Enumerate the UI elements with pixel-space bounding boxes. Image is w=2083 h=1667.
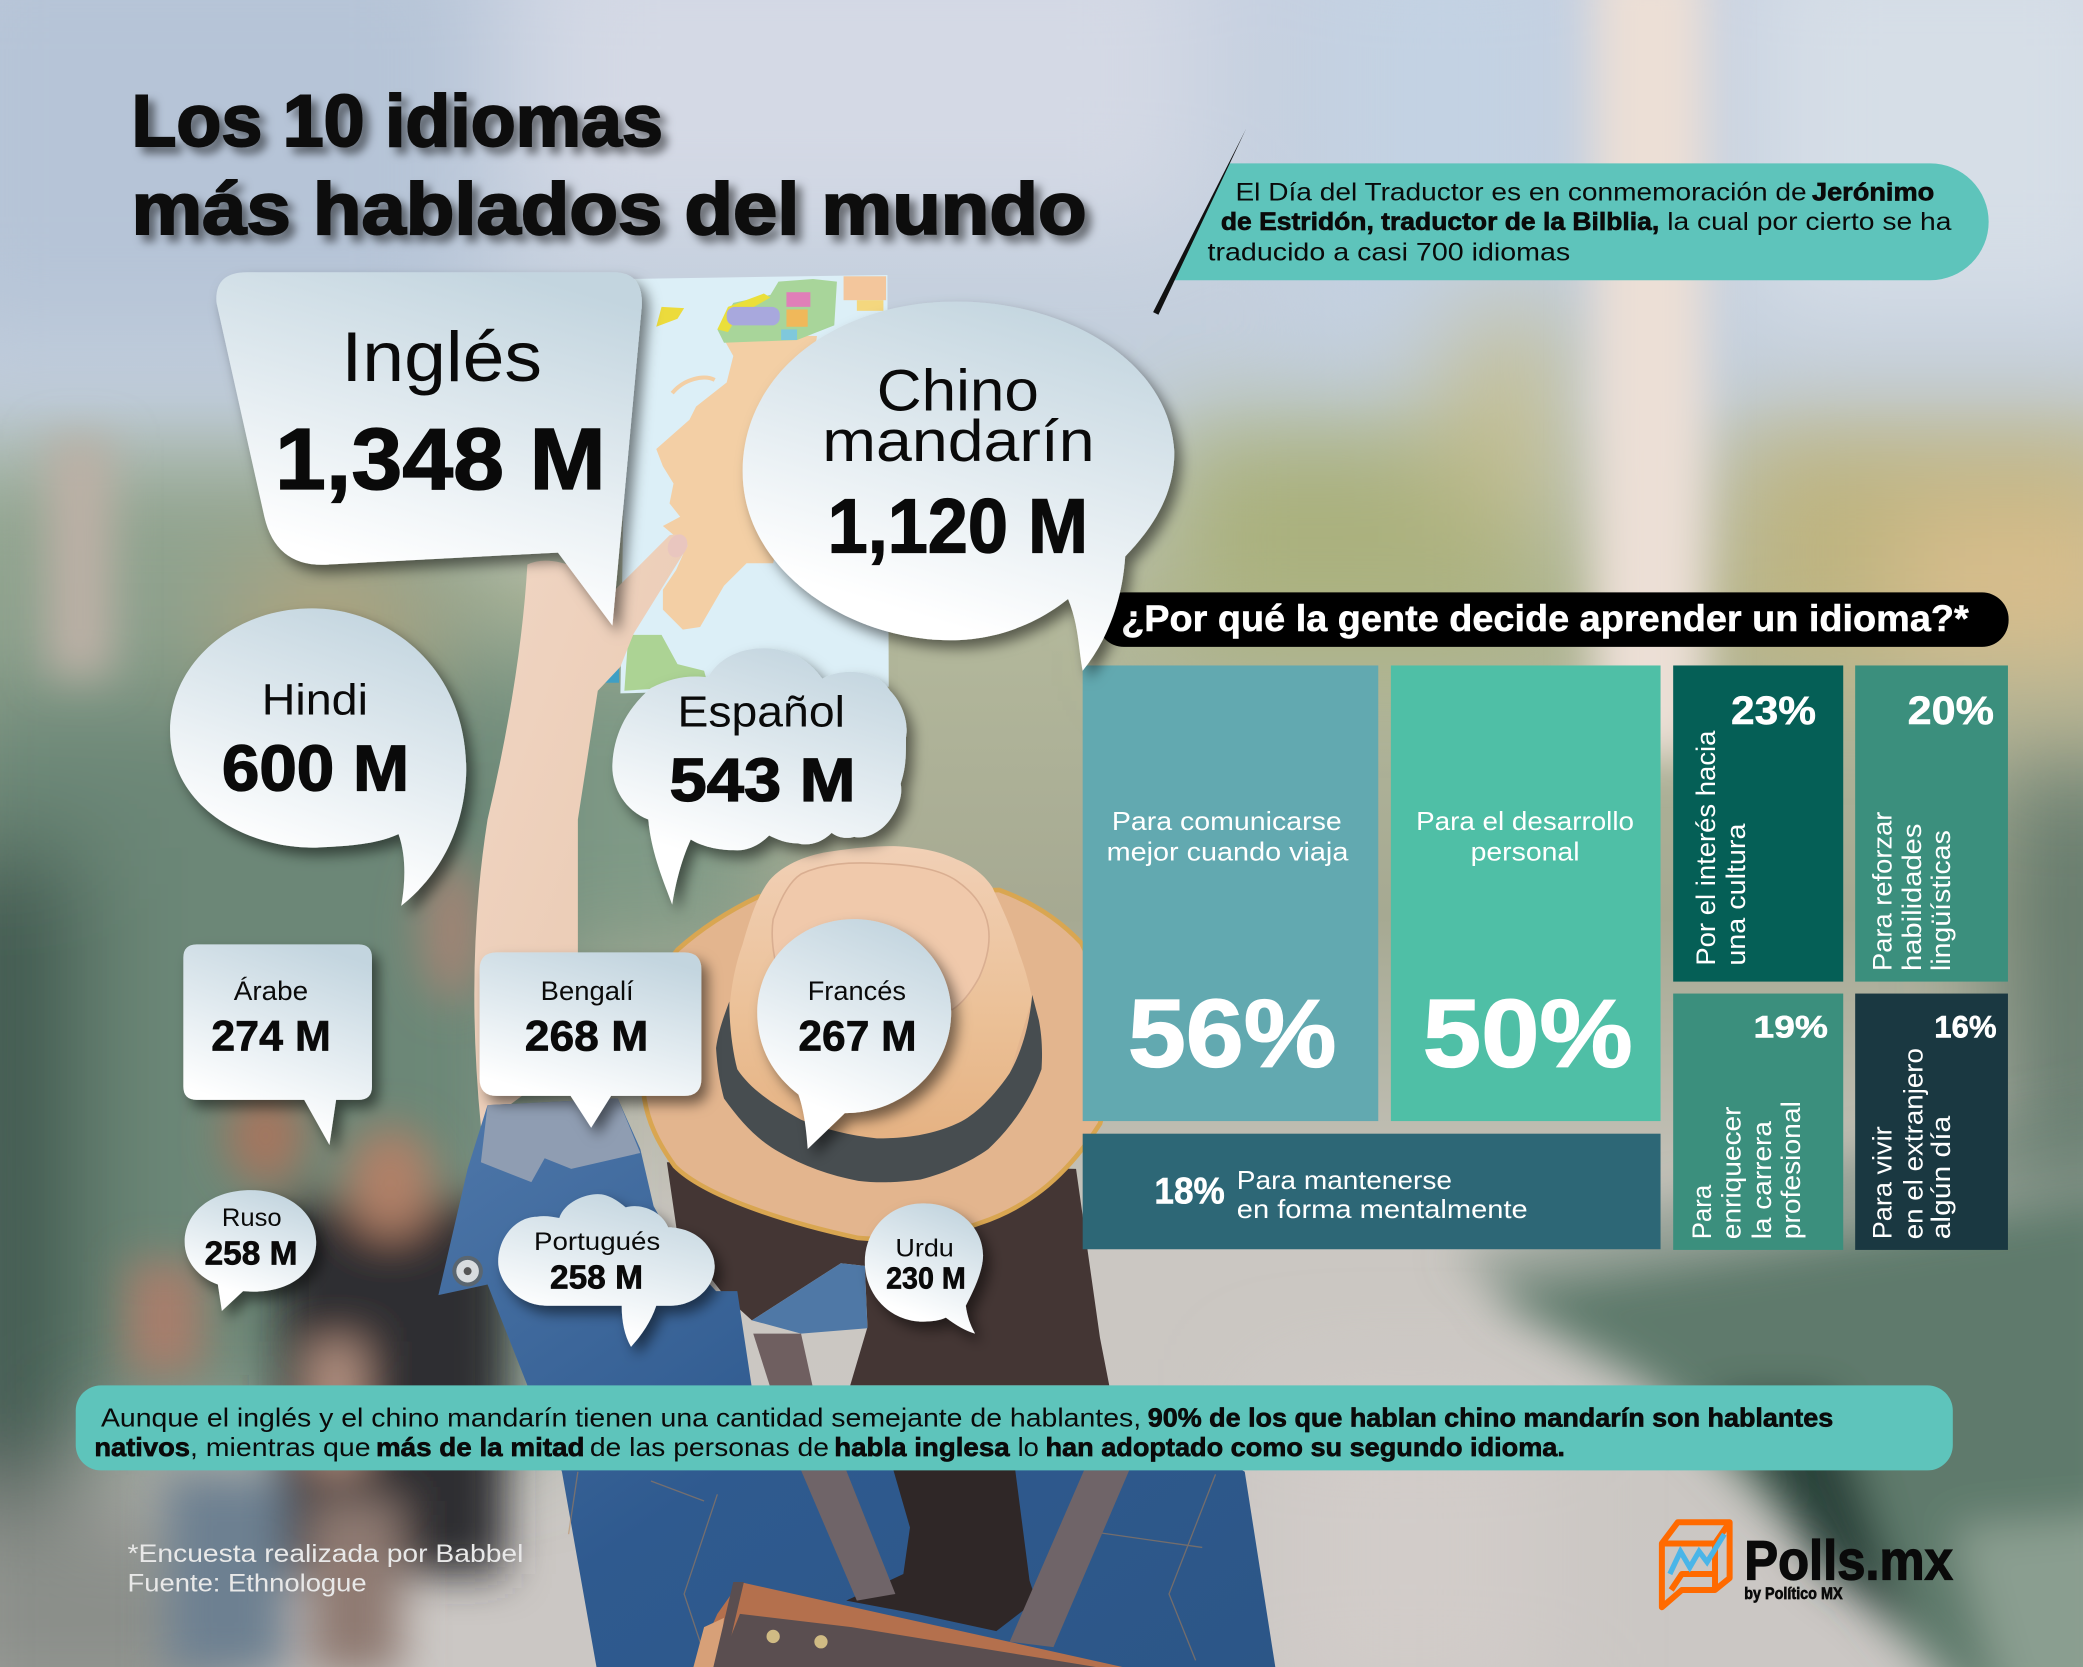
callout: nota inferior: , mientras que xyxy=(190,1434,371,1462)
callout: Día del Traductor: traducido a casi 700 idiomas xyxy=(1208,239,1570,266)
photo: backpack xyxy=(693,1334,1129,1667)
bubble: Inglés: Inglés xyxy=(341,317,542,396)
photo: denim jacket xyxy=(438,1098,1275,1667)
footnote: fuente: *Encuesta realizada por Babbel xyxy=(128,1540,523,1568)
tile: 18% forma mental: en forma mentalmente xyxy=(1237,1196,1528,1224)
tile: 56% viajar: Para comunicarse xyxy=(1112,808,1342,836)
title: más hablados del mundo xyxy=(132,169,1087,250)
logo: Polls.mx: Polls.mx xyxy=(1744,1528,1953,1591)
bubble: Árabe: Árabe xyxy=(234,976,308,1006)
photo: raised arm and hand xyxy=(474,534,688,1126)
logo: Polls.mx: by Político MX xyxy=(1744,1584,1843,1603)
tile: 56% viajar: mejor cuando viaja xyxy=(1107,839,1349,867)
callout: nota inferior: más de la mitad xyxy=(376,1434,585,1462)
callout: nota inferior: nativos xyxy=(94,1434,190,1462)
bubble: Chino mandarín: mandarín xyxy=(822,409,1095,474)
bubble: Inglés: 1,348 M xyxy=(275,410,606,508)
logo: Polls.mx xyxy=(1662,1522,1953,1607)
callout: nota inferior: 90% de los que hablan chino mandarín son hablantes xyxy=(1148,1405,1833,1433)
tile: 23% cultura: 23% xyxy=(1731,689,1816,733)
bubble: Hindi xyxy=(170,608,466,906)
tile: 56% viajar: 56% xyxy=(1128,979,1336,1088)
bubble: Chino mandarín: Chino xyxy=(877,358,1039,423)
bubble: Português xyxy=(498,1194,715,1347)
tile: 50% desarrollo personal: personal xyxy=(1471,839,1580,867)
tile: 18% forma mental xyxy=(1083,1134,1661,1249)
bubble: Ruso: 258 M xyxy=(205,1236,298,1273)
photo: held-up map xyxy=(600,275,889,693)
bubble: Urdu xyxy=(865,1203,983,1334)
tile: 16% extranjero: Para vivir xyxy=(1868,1126,1898,1239)
tile: 19% carrera: 19% xyxy=(1754,1008,1828,1044)
tile: 23% cultura: una cultura xyxy=(1721,823,1751,966)
tile: 20% habilidades: lingüísticas xyxy=(1926,830,1956,971)
bubble: Hindi: 600 M xyxy=(222,731,409,804)
tile: 16% extranjero: algún día xyxy=(1926,1115,1956,1239)
bubble: Francés: Francés xyxy=(808,976,906,1006)
footnote: fuente xyxy=(128,1540,523,1597)
icon: speech-bubble cube xyxy=(1662,1522,1730,1607)
tile: 20% habilidades: habilidades xyxy=(1897,824,1927,971)
tile: 50% desarrollo personal: Para el desarrollo xyxy=(1416,808,1634,836)
callout: nota inferior: han adoptado como su segundo idioma. xyxy=(1045,1434,1565,1462)
tile: 20% habilidades: 20% xyxy=(1908,689,1994,733)
photo: hair xyxy=(667,1162,1109,1385)
bubble: Inglés xyxy=(216,272,642,626)
bubble: Bengalí: Bengalí xyxy=(541,976,634,1006)
photo: hair strand xyxy=(846,1468,1036,1631)
tile: 23% cultura: Por el interés hacia xyxy=(1691,730,1721,966)
tile: 50% desarrollo personal: 50% xyxy=(1423,979,1633,1088)
tile: 16% extranjero: en el extranjero xyxy=(1898,1048,1928,1239)
callout: nota inferior: habla inglesa xyxy=(834,1434,1010,1462)
bubble: Bengalí: 268 M xyxy=(525,1014,648,1061)
tile: 23% cultura xyxy=(1673,665,1843,982)
heading: por qué aprender: ¿Por qué la gente decide aprender un idioma?* xyxy=(1121,597,1969,639)
bubble: Hindi: Hindi xyxy=(262,676,368,725)
callout: Día del Traductor: la cual por cierto se ha xyxy=(1667,209,1952,236)
bubble: Urdu: 230 M xyxy=(886,1261,966,1295)
bubble: Francés: 267 M xyxy=(798,1014,917,1061)
callout: nota inferior xyxy=(76,1385,1953,1470)
tile: 19% carrera xyxy=(1673,994,1843,1250)
photo: tan hat xyxy=(643,846,1108,1239)
photo: thumbnail xyxy=(664,531,691,561)
tile: 18% forma mental: Para mantenerse xyxy=(1237,1167,1452,1195)
callout: nota inferior: lo xyxy=(1018,1434,1039,1462)
tile: 19% carrera: enriquecer xyxy=(1716,1106,1746,1239)
tile: 19% carrera: Para xyxy=(1687,1185,1717,1239)
bubble: Ruso xyxy=(185,1190,316,1311)
bubble: Francés xyxy=(757,919,951,1149)
footnote: fuente: Fuente: Ethnologue xyxy=(128,1569,367,1597)
callout: nota inferior: de las personas de xyxy=(590,1434,829,1462)
tile: 20% habilidades: Para reforzar xyxy=(1868,811,1898,971)
title: Los 10 idiomas xyxy=(132,81,663,162)
treemap panel: motivos xyxy=(1083,665,2008,1250)
tile: 18% forma mental: 18% xyxy=(1154,1169,1225,1211)
callout: nota inferior: Aunque el inglés y el chino mandarín tienen una cantidad semejante de hablantes, xyxy=(101,1405,1141,1433)
tile: 20% habilidades xyxy=(1855,665,2008,982)
bubble: Urdu: Urdu xyxy=(895,1235,954,1263)
tile: 56% viajar xyxy=(1083,665,1378,1121)
tile: 16% extranjero: 16% xyxy=(1934,1008,1997,1044)
bubble: Árabe xyxy=(183,944,372,1145)
callout: Día del Traductor: Jerónimo xyxy=(1812,180,1934,207)
bubble: Español: Español xyxy=(678,688,845,737)
bubble: Árabe: 274 M xyxy=(211,1014,331,1061)
tile: 50% desarrollo personal xyxy=(1391,665,1661,1121)
tile: 19% carrera: la carrera xyxy=(1747,1121,1777,1239)
callout: Día del Traductor: de Estridón, traductor de la Bilblia, xyxy=(1221,209,1659,236)
tile: 16% extranjero xyxy=(1855,994,2008,1250)
bubble: Chino mandarín: 1,120 M xyxy=(828,484,1088,570)
callout: Día del Traductor: El Día del Traductor es en conmemoración de xyxy=(1235,180,1807,207)
bubble: Ruso: Ruso xyxy=(222,1204,282,1232)
tile: 19% carrera: profesional xyxy=(1776,1101,1806,1239)
icon: trend line xyxy=(1670,1534,1724,1574)
bubble: Português: 258 M xyxy=(550,1259,643,1296)
callout: Día del Traductor xyxy=(1153,129,1989,315)
bubble: Bengalí xyxy=(480,952,701,1128)
bubble: Português: Portugués xyxy=(534,1228,660,1256)
bubble: Español: 543 M xyxy=(670,746,856,814)
title xyxy=(132,81,1087,250)
bubble: Chino mandarín xyxy=(743,302,1174,671)
bubble: Español xyxy=(612,648,907,905)
